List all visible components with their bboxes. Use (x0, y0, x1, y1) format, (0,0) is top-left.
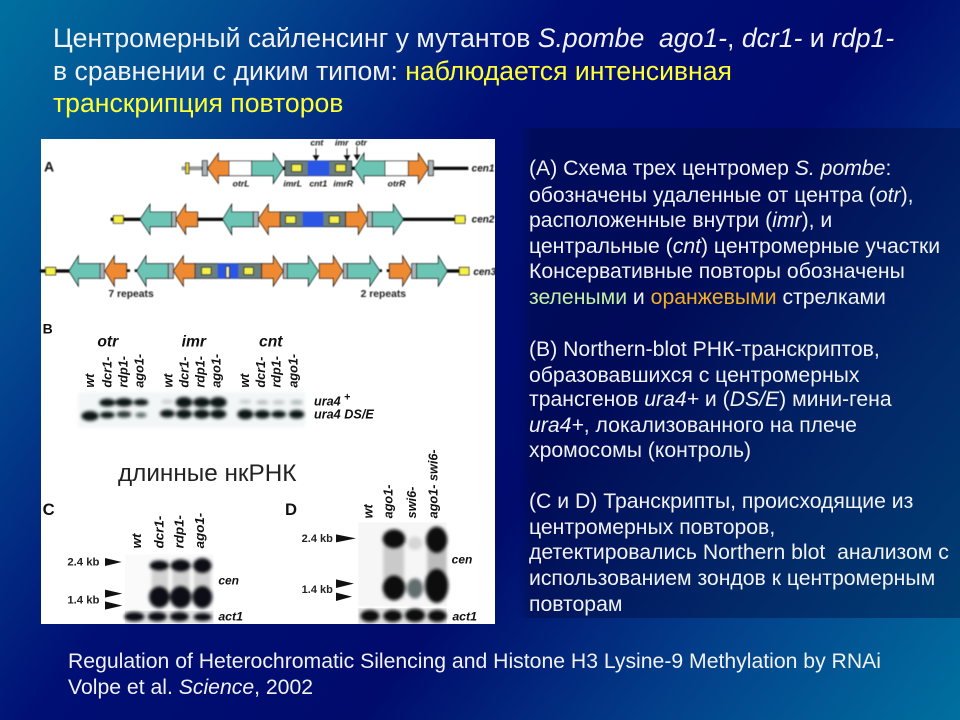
panel D: northern blot: D (285, 500, 297, 519)
gel D (358, 522, 448, 624)
panel A: centromere schematics: otrL (233, 178, 249, 188)
panel B: northern blot: wt (83, 373, 97, 388)
text block: panels C and D description: детектировались Northern blot анализом с (529, 541, 949, 564)
panel D: northern blot: ago1- swi6- (426, 449, 440, 518)
cen1 schematic (182, 147, 468, 183)
panel C: northern blot: wt (129, 533, 144, 548)
panel D: northern blot: swi6- (405, 487, 419, 518)
label: long ncRNA: длинные нкРНК (118, 460, 297, 487)
panel C: northern blot: C (43, 500, 55, 519)
cen3 schematic (40, 256, 469, 286)
text block: panel A description: обозначены удаленные от центра (otr), (529, 184, 914, 207)
cen2 schematic (111, 204, 466, 234)
panel A: centromere schematics: cen1 (472, 163, 495, 174)
panel B: northern blot (43, 321, 374, 427)
panel: explanation background (518, 128, 960, 618)
panel D: northern blot: 1.4 kb (302, 584, 333, 596)
panel D: northern blot: act1 (452, 609, 477, 623)
text block: panel A description: расположенные внутри (imr), и (529, 209, 832, 232)
panel A: centromere schematics: cnt1 (309, 178, 327, 188)
text block: panel B description: образовавшихся с центромерных (529, 364, 860, 387)
blot bands (78, 392, 305, 427)
panel B: northern blot: ura4 (314, 395, 341, 409)
panel D: northern blot: wt (362, 503, 376, 518)
panel A: centromere schematics: 7 repeats (108, 289, 154, 300)
panel A: centromere schematics: otr (355, 138, 368, 148)
panel A: centromere schematics (40, 138, 497, 300)
panel B: northern blot: dcr1- (177, 357, 191, 388)
text block: panel A description: зелеными и оранжевыми стрелками (529, 286, 886, 309)
panel C: northern blot: act1 (218, 609, 243, 623)
panel B: northern blot: rdp1- (116, 356, 130, 388)
panel B: northern blot: B (43, 321, 53, 337)
panel C: northern blot (43, 500, 243, 623)
panel D: northern blot: ago1- (382, 485, 396, 518)
citation (68, 650, 881, 699)
text block: panels C and D description: центромерных повторов, (529, 516, 775, 539)
panel B: northern blot: ago1- (287, 354, 301, 388)
panel B: northern blot: cnt (259, 334, 283, 351)
text block: panels C and D description (529, 490, 949, 616)
panel A: centromere schematics: imr (335, 138, 349, 148)
panel A: centromere schematics: cen3 (473, 267, 497, 278)
panel B: northern blot: dcr1- (254, 357, 268, 388)
panel A: centromere schematics: A (44, 159, 54, 175)
panel A: centromere schematics: otrR (388, 178, 406, 188)
panel C: northern blot: cen (218, 573, 239, 587)
panel C: northern blot: ago1- (192, 512, 207, 548)
panel C: northern blot: 2.4 kb (67, 557, 100, 569)
panel A: centromere schematics: cen2 (472, 215, 495, 226)
text block: panel B description: хромосомы (контроль) (529, 439, 751, 462)
panel: figure white background (41, 139, 495, 624)
panel A: centromere schematics: 2 repeats (361, 289, 406, 300)
text block: panel A description: Консервативные повторы обозначены (529, 260, 905, 283)
panel B: northern blot: ago1- (132, 354, 146, 388)
panel B: northern blot: rdp1- (270, 356, 284, 388)
citation: Regulation of Heterochromatic Silencing and Histone H3 Lysine-9 Methylation by RNAi (68, 650, 881, 673)
title: транскрипция повторов (53, 88, 343, 118)
panel D: northern blot: cen (452, 553, 472, 567)
text block: panel B description: трансгенов ura4+ и (DS/E) мини-гена (529, 388, 892, 411)
text block: panels C and D description: использованием зондов к центромерным (529, 567, 935, 590)
gel C (124, 554, 213, 623)
panel B: northern blot: dcr1- (100, 357, 114, 388)
citation: Volpe et al. Science, 2002 (68, 676, 313, 699)
text block: panel A description (529, 157, 940, 309)
panel A: centromere schematics: imrL (283, 178, 302, 188)
text block: panel B description: ura4+, локализованного на плече (529, 414, 857, 437)
title: в сравнении с диким типом: наблюдается интенсивная (53, 56, 732, 86)
panel B: northern blot: ura4 DS/E (314, 407, 374, 421)
text block: panels C and D description: повторам (529, 593, 622, 616)
panel B: northern blot: wt (161, 373, 175, 388)
text block: panel A description: (A) Схема трех центромер S. pombe: (529, 157, 891, 180)
text block: panel B description (529, 338, 892, 462)
panel B: northern blot: ago1- (209, 354, 223, 388)
text block: panels C and D description: (C и D) Транскрипты, происходящие из (529, 490, 913, 513)
panel D: northern blot (285, 449, 477, 624)
panel B: northern blot: wt (238, 373, 252, 388)
panel A: centromere schematics: imrR (333, 178, 354, 188)
title (53, 23, 894, 118)
panel B: northern blot: otr (97, 334, 119, 351)
text block: panel A description: центральные (cnt) центромерные участки (529, 235, 940, 258)
panel C: northern blot: rdp1- (171, 514, 186, 548)
panel C: northern blot: dcr1- (151, 515, 166, 548)
text block: panel B description: (B) Northern-blot РНК-транскриптов, (529, 338, 880, 361)
panel C: northern blot: 1.4 kb (67, 595, 100, 607)
panel B: northern blot: imr (182, 334, 207, 351)
panel B: northern blot: + (344, 391, 350, 403)
panel D: northern blot: 2.4 kb (302, 533, 333, 545)
panel A: centromere schematics: cnt (310, 138, 324, 148)
panel B: northern blot: rdp1- (193, 356, 207, 388)
title: Центромерный сайленсинг у мутантов S.pombe ago1-, dcr1- и rdp1- (53, 23, 894, 53)
